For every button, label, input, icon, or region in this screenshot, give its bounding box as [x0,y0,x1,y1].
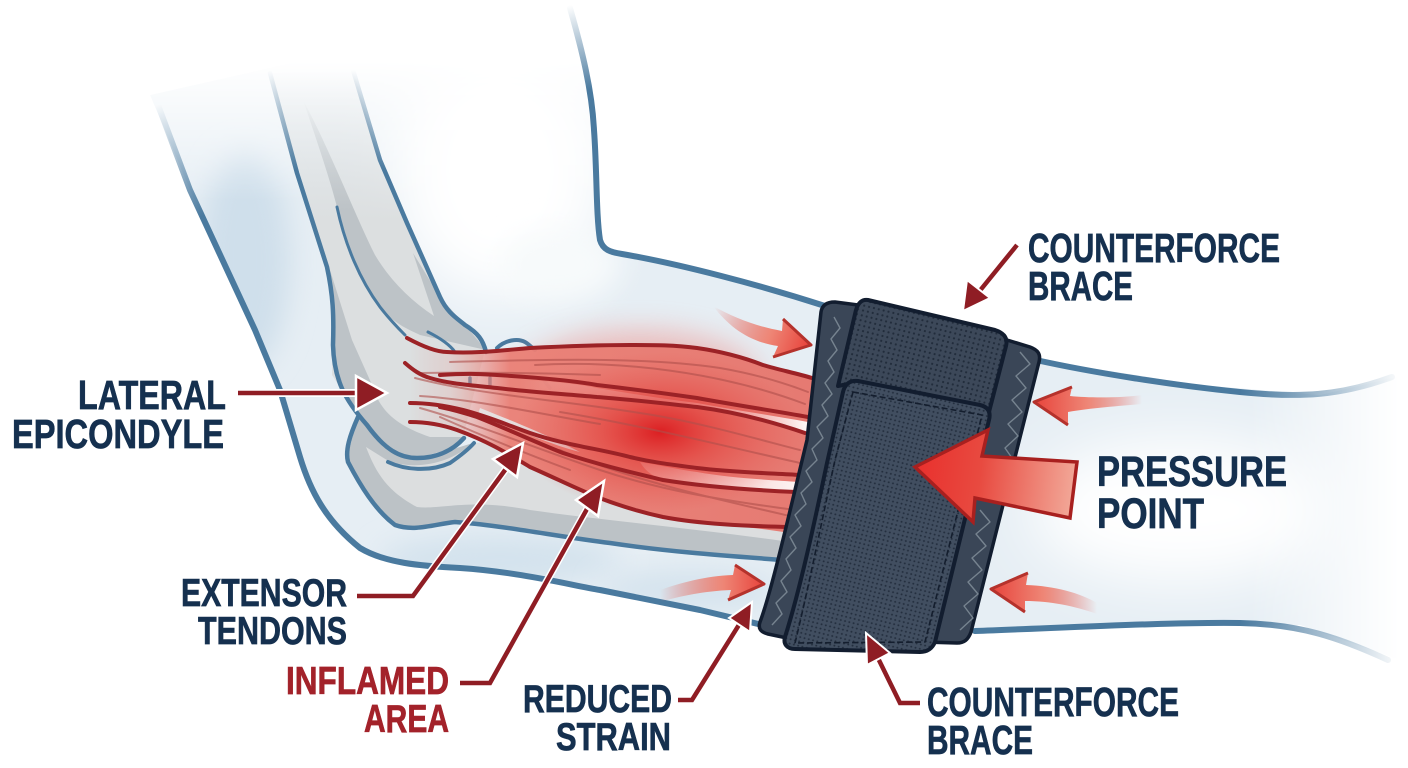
brace front panel [784,381,990,652]
brace back strap [759,302,1040,643]
arrow: upper right compression [1034,387,1142,425]
bone outlines [270,70,782,560]
arm skin silhouette [156,107,1350,640]
arrow: lateral epicondyle [238,376,387,410]
left zigzag stitching [772,317,840,625]
muscle fibres [415,360,808,516]
right zigzag stitching, upper [1005,352,1030,458]
right zigzag stitching, lower [960,510,990,630]
inflamed glow around muscle [520,330,760,430]
label: reduced strain [523,678,672,759]
arrow heads outline [728,319,1072,612]
label: lateral epicondyle: LATERAL [78,372,226,418]
label: lateral epicondyle: EPICONDYLE [12,411,224,457]
label arrows [238,245,1017,703]
arrow: extensor tendons [357,443,523,596]
big pressure arrow [915,430,1077,522]
arrow: upper left compression [713,306,811,357]
label: counterforce brace top: COUNTERFORCE [1028,225,1280,271]
label: extensor tendons [181,572,347,653]
muscle outlines [405,338,812,527]
label: extensor tendons: TENDONS [198,610,347,653]
label: pressure point: PRESSURE [1097,448,1287,496]
label: reduced strain: REDUCED [523,678,672,721]
arrow: lower right compression [991,573,1097,614]
compression arrows [660,306,1142,614]
label: counterforce brace top: BRACE [1028,263,1133,309]
label: counterforce brace top [1028,225,1280,309]
arrow: lower left compression [660,565,764,602]
label: counterforce brace bottom: BRACE [927,717,1033,763]
front panel dashed stitching [795,392,982,643]
arrow: reduced strain [678,602,752,700]
arm outline strokes [158,8,1392,660]
bones: humerus and forearm bones [270,70,783,560]
inflamed hot spot [515,352,805,512]
arrow: counterforce brace top [963,245,1017,311]
label: reduced strain: STRAIN [556,716,671,759]
counterforce brace [759,300,1040,652]
arrow: inflamed area [460,481,604,683]
label: inflamed area [286,660,449,741]
arrow: counterforce brace bottom [866,633,920,703]
extensor muscle and tendons [404,338,815,535]
label: counterforce brace bottom [927,679,1179,763]
band gap highlights [497,379,808,433]
label: pressure point [1097,448,1287,538]
label: counterforce brace bottom: COUNTERFORCE [927,679,1179,725]
label: pressure point: POINT [1097,490,1204,538]
label: extensor tendons: EXTENSOR [181,572,347,615]
label: inflamed area: INFLAMED [286,660,449,703]
brace upper panel [838,300,1007,412]
label: inflamed area: AREA [364,698,449,741]
label: lateral epicondyle [12,372,226,457]
